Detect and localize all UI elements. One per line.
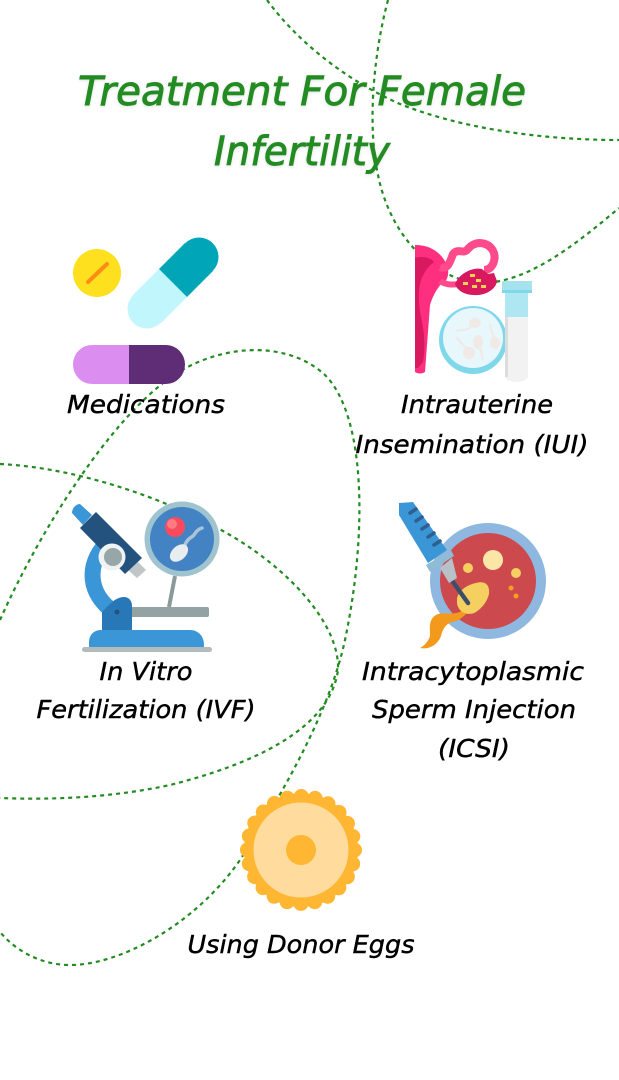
icon: intrauterine insemination bbox=[415, 243, 532, 382]
label: In Vitro Fertilization bbox=[36, 657, 256, 724]
label: Intracytoplasmic Sperm Injection: Sperm Injection bbox=[372, 695, 576, 724]
label: Medications: Medications bbox=[67, 390, 225, 419]
label: Using Donor Eggs: Using Donor Eggs bbox=[188, 930, 414, 959]
icon: donor egg bbox=[244, 793, 358, 907]
label: In Vitro Fertilization: In Vitro bbox=[100, 657, 192, 686]
label: Intrauterine Insemination: Intrauterine bbox=[401, 390, 553, 419]
icon: medications bbox=[73, 238, 219, 384]
title: Infertility bbox=[214, 129, 391, 175]
icon: sperm injection bbox=[399, 502, 546, 648]
label: Intracytoplasmic Sperm Injection: Intracytoplasmic bbox=[362, 657, 584, 686]
icon: microscope bbox=[72, 502, 220, 652]
title bbox=[78, 69, 526, 175]
label: Intrauterine Insemination: Insemination (IUI) bbox=[356, 430, 588, 459]
title: Treatment For Female bbox=[78, 69, 526, 115]
label: In Vitro Fertilization: Fertilization (IVF) bbox=[36, 695, 256, 724]
label: Intracytoplasmic Sperm Injection: (ICSI) bbox=[438, 734, 510, 763]
label: Intracytoplasmic Sperm Injection bbox=[362, 657, 584, 763]
label: Intrauterine Insemination bbox=[356, 390, 588, 459]
